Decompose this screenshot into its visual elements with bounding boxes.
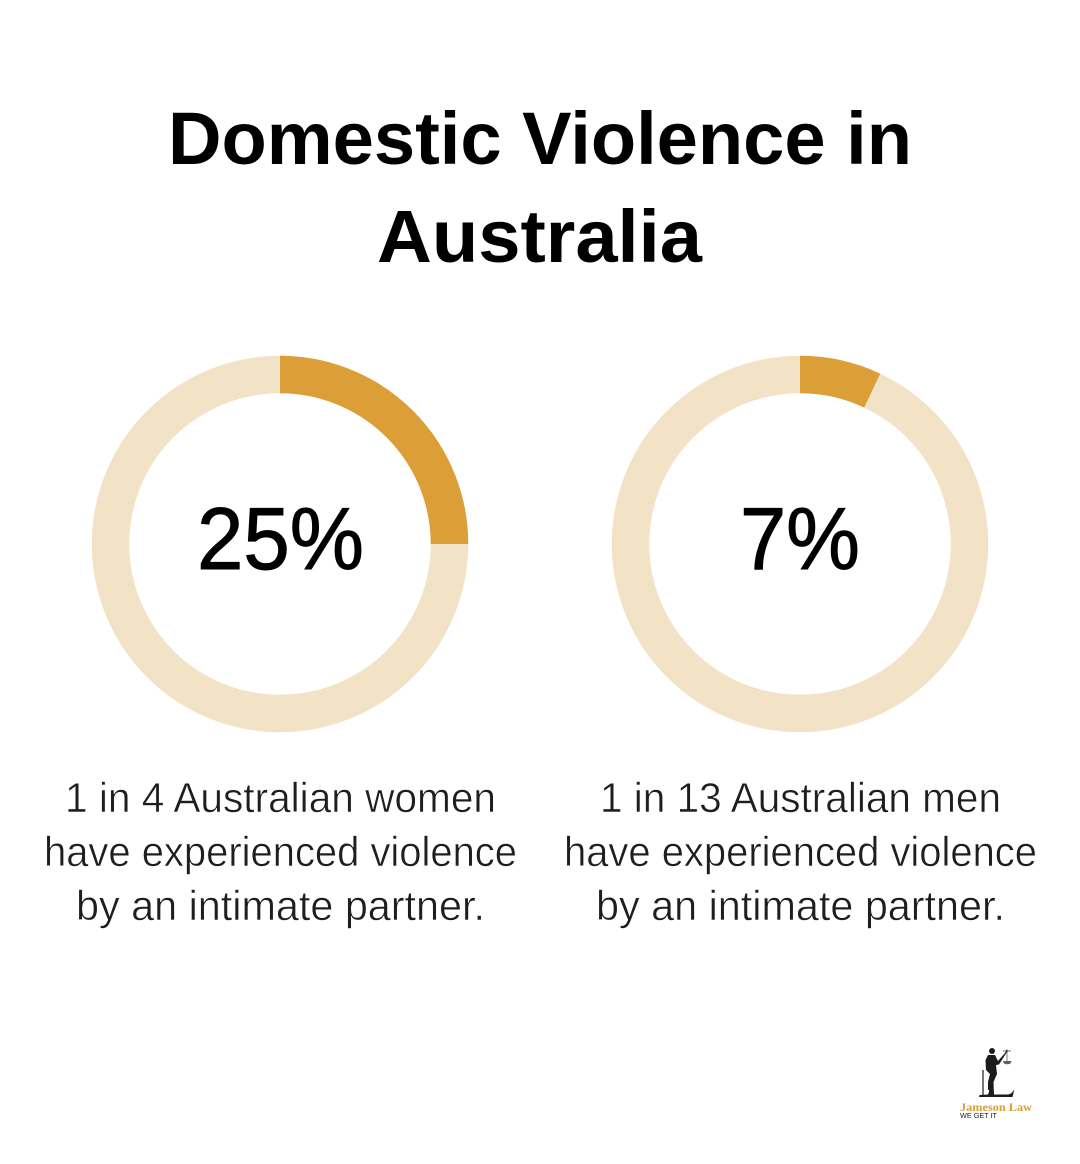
title: Domestic Violence in [168, 97, 912, 180]
description: men: have experienced violence [564, 828, 1037, 875]
logo: Jameson Law [960, 1048, 1033, 1120]
title: Australia [377, 195, 703, 278]
description: men: by an intimate partner. [596, 882, 1005, 929]
value: 25%: 25% [197, 489, 364, 588]
panel: women statistic [44, 374, 517, 929]
description: men: 1 in 13 Australian men [600, 774, 1001, 821]
description: women: by an intimate partner. [76, 882, 485, 929]
logo name: Jameson Law [960, 1102, 1033, 1114]
icon: scales [1003, 1050, 1012, 1064]
description: women: 1 in 4 Australian women [65, 774, 496, 821]
title [168, 97, 912, 278]
description: women: have experienced violence [44, 828, 517, 875]
donut chart: 7% [630, 374, 970, 714]
icon: lady justice [979, 1048, 1014, 1097]
description: women [44, 774, 517, 929]
donut chart: 25% [110, 374, 450, 714]
value: 7%: 7% [740, 489, 860, 588]
panel: men statistic [564, 374, 1037, 929]
logo tagline: WE GET IT [960, 1113, 998, 1120]
description: men [564, 774, 1037, 929]
